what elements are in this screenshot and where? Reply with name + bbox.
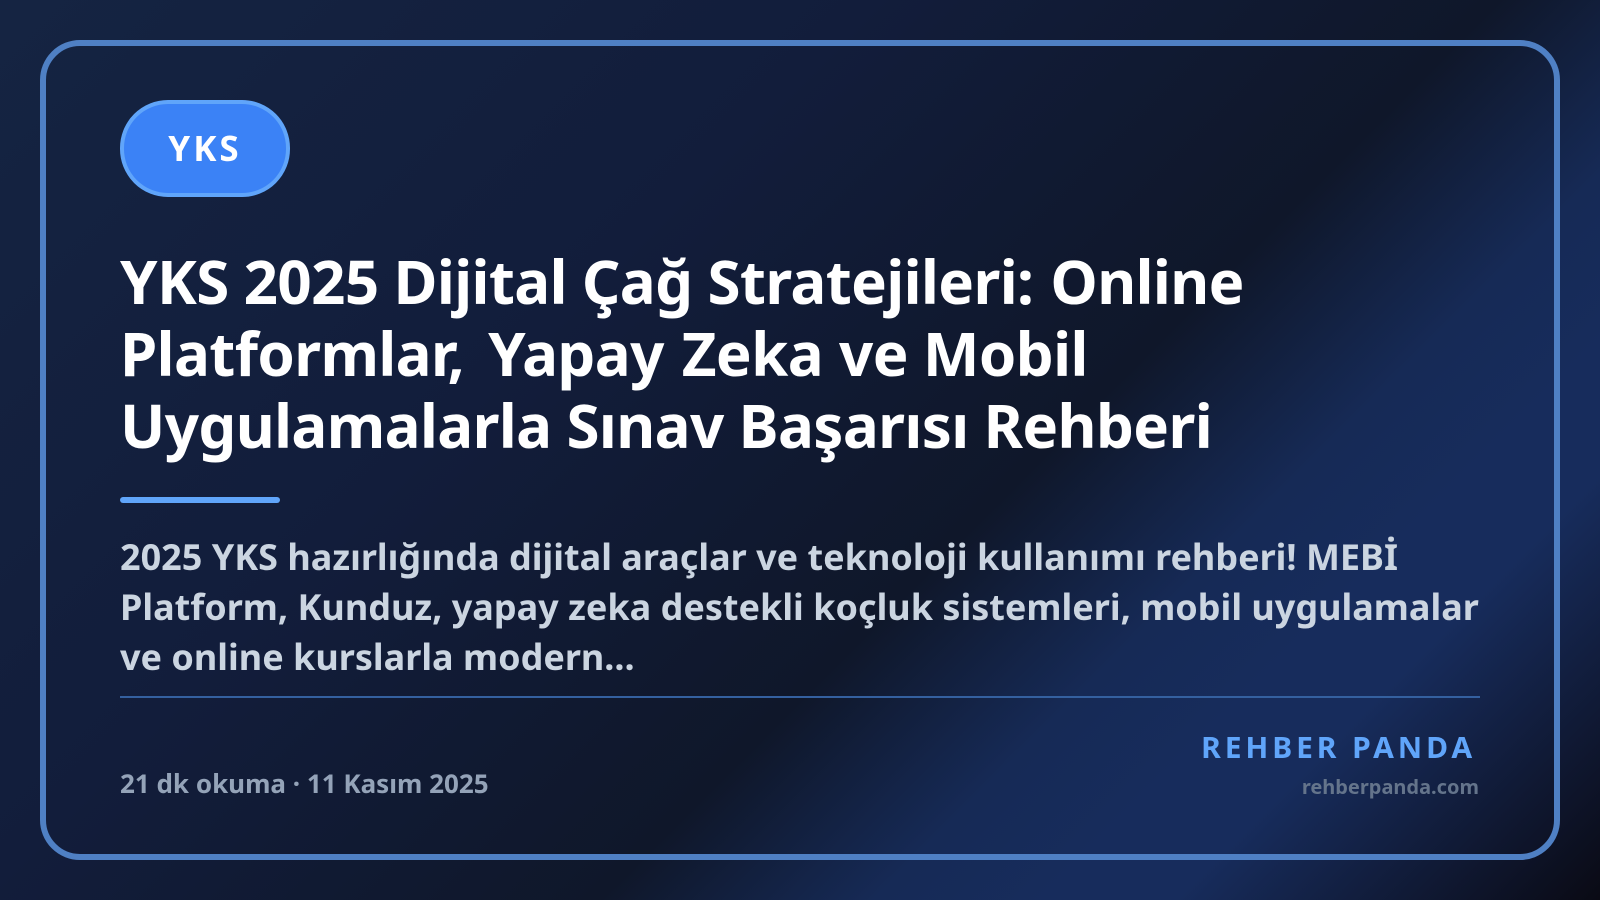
description: ve online kurslarla modern... xyxy=(120,632,635,681)
title: Uygulamalarla Sınav Başarısı Rehberi xyxy=(120,384,1212,466)
title: ve Mobil xyxy=(839,312,1088,394)
brand name: REHBER PANDA xyxy=(1201,726,1476,767)
accent bar xyxy=(120,497,280,503)
title: Platformlar, Yapay xyxy=(120,312,664,394)
description: 2025 YKS hazırlığında dijital araçlar ve teknoloji kullanımı rehberi! MEBİ xyxy=(120,532,1398,581)
title: YKS 2025 Dijital Çağ Stratejileri: xyxy=(120,240,1033,322)
category badge xyxy=(120,100,290,197)
title: Zeka xyxy=(682,312,823,394)
divider xyxy=(120,696,1480,698)
title xyxy=(120,240,1244,466)
description: Platform, Kunduz, yapay zeka destekli koçluk sistemleri, mobil uygulamalar xyxy=(120,582,1479,631)
category badge: YKS xyxy=(168,125,242,172)
reading time and date: 21 dk okuma · 11 Kasım 2025 xyxy=(120,765,489,801)
title: Online xyxy=(1050,240,1244,322)
website: rehberpanda.com xyxy=(1302,773,1479,800)
description xyxy=(120,532,1479,681)
